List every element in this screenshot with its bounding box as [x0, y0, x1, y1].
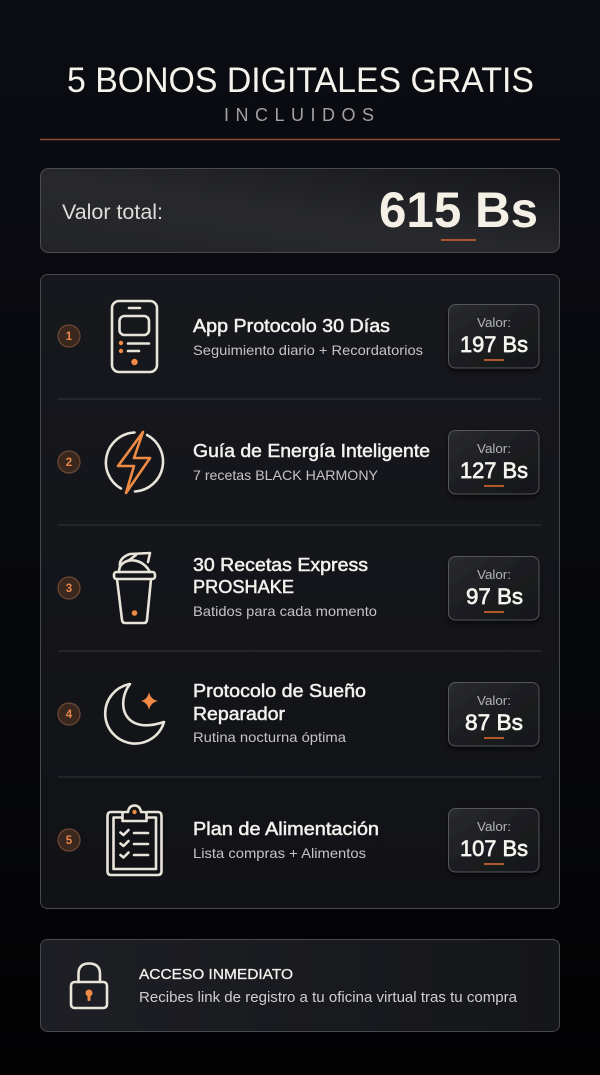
- bonus 3 text: Batidos para cada momento: [193, 603, 377, 619]
- icon: shaker: [114, 553, 155, 623]
- price 127: [448, 430, 539, 494]
- icon: moon and star: [105, 684, 164, 744]
- bonus 3 text: PROSHAKE: [193, 577, 294, 597]
- price 87: 87 Bs: [465, 710, 523, 735]
- price 97: Valor:: [477, 568, 511, 582]
- access text: ACCESO INMEDIATO: [139, 966, 293, 983]
- bonus 5 text: Lista compras + Alimentos: [193, 845, 366, 861]
- total label: Valor total:: [62, 201, 163, 224]
- number badge 5: [58, 829, 80, 851]
- number badge 3: 3: [66, 583, 72, 595]
- icon: phone: [112, 301, 157, 372]
- bonus 5 text: [193, 819, 379, 861]
- number badge 2: [58, 451, 80, 473]
- number badge 4: 4: [66, 709, 73, 721]
- panel: total value: [40, 168, 560, 252]
- bonus 3: [58, 553, 539, 623]
- number badge 2: 2: [66, 457, 72, 469]
- bonus 1 text: Seguimiento diario + Recordatorios: [193, 342, 423, 358]
- bonus 1 text: App Protocolo 30 Días: [193, 316, 390, 336]
- icon: clipboard checklist: [108, 806, 162, 875]
- number badge 4: [58, 703, 80, 725]
- bonus 5 text: Plan de Alimentación: [193, 819, 379, 839]
- number badge 1: [58, 325, 80, 347]
- panel: immediate access: [40, 940, 560, 1032]
- bonus 1: [58, 301, 539, 372]
- panel: bonus list: [40, 274, 560, 908]
- price 107: 107 Bs: [460, 836, 528, 861]
- price 197: [448, 304, 539, 368]
- bonus 2: [58, 430, 539, 494]
- access text: [139, 966, 518, 1006]
- price 87: [448, 682, 539, 746]
- price 127: Valor:: [477, 442, 511, 456]
- bonus 1 text: [193, 316, 423, 358]
- price 87: Valor:: [477, 694, 511, 708]
- title: 5 BONOS DIGITALES GRATIS: [67, 61, 534, 100]
- number badge 3: [58, 577, 80, 599]
- subtitle: INCLUIDOS: [224, 105, 374, 125]
- total amount: 615 Bs: [379, 182, 538, 238]
- price 107: [448, 808, 539, 872]
- bonus 4 text: Reparador: [193, 704, 285, 724]
- bonus 4 text: [193, 681, 366, 745]
- bonus 3 text: [193, 555, 377, 619]
- bonus 5: [58, 806, 539, 875]
- bonus 4 text: Rutina nocturna óptima: [193, 729, 346, 745]
- bonus 2 text: Guía de Energía Inteligente: [193, 441, 430, 461]
- bonus 4 text: Protocolo de Sueño: [193, 681, 366, 701]
- number badge 5: 5: [66, 835, 73, 847]
- icon: padlock: [71, 964, 107, 1008]
- bonus 2 text: 7 recetas BLACK HARMONY: [193, 467, 379, 483]
- price 107: Valor:: [477, 820, 511, 834]
- price 97: [448, 556, 539, 620]
- number badge 1: 1: [66, 331, 73, 343]
- icon: lightning bolt: [106, 432, 163, 493]
- price 197: 197 Bs: [460, 332, 528, 357]
- price 127: 127 Bs: [460, 458, 528, 483]
- price 97: 97 Bs: [466, 584, 523, 609]
- price 197: Valor:: [477, 316, 511, 330]
- access text: Recibes link de registro a tu oficina virtual tras tu compra: [139, 990, 518, 1006]
- bonus 4: [58, 681, 539, 746]
- bonus 3 text: 30 Recetas Express: [193, 555, 368, 575]
- bonus 2 text: [193, 441, 430, 483]
